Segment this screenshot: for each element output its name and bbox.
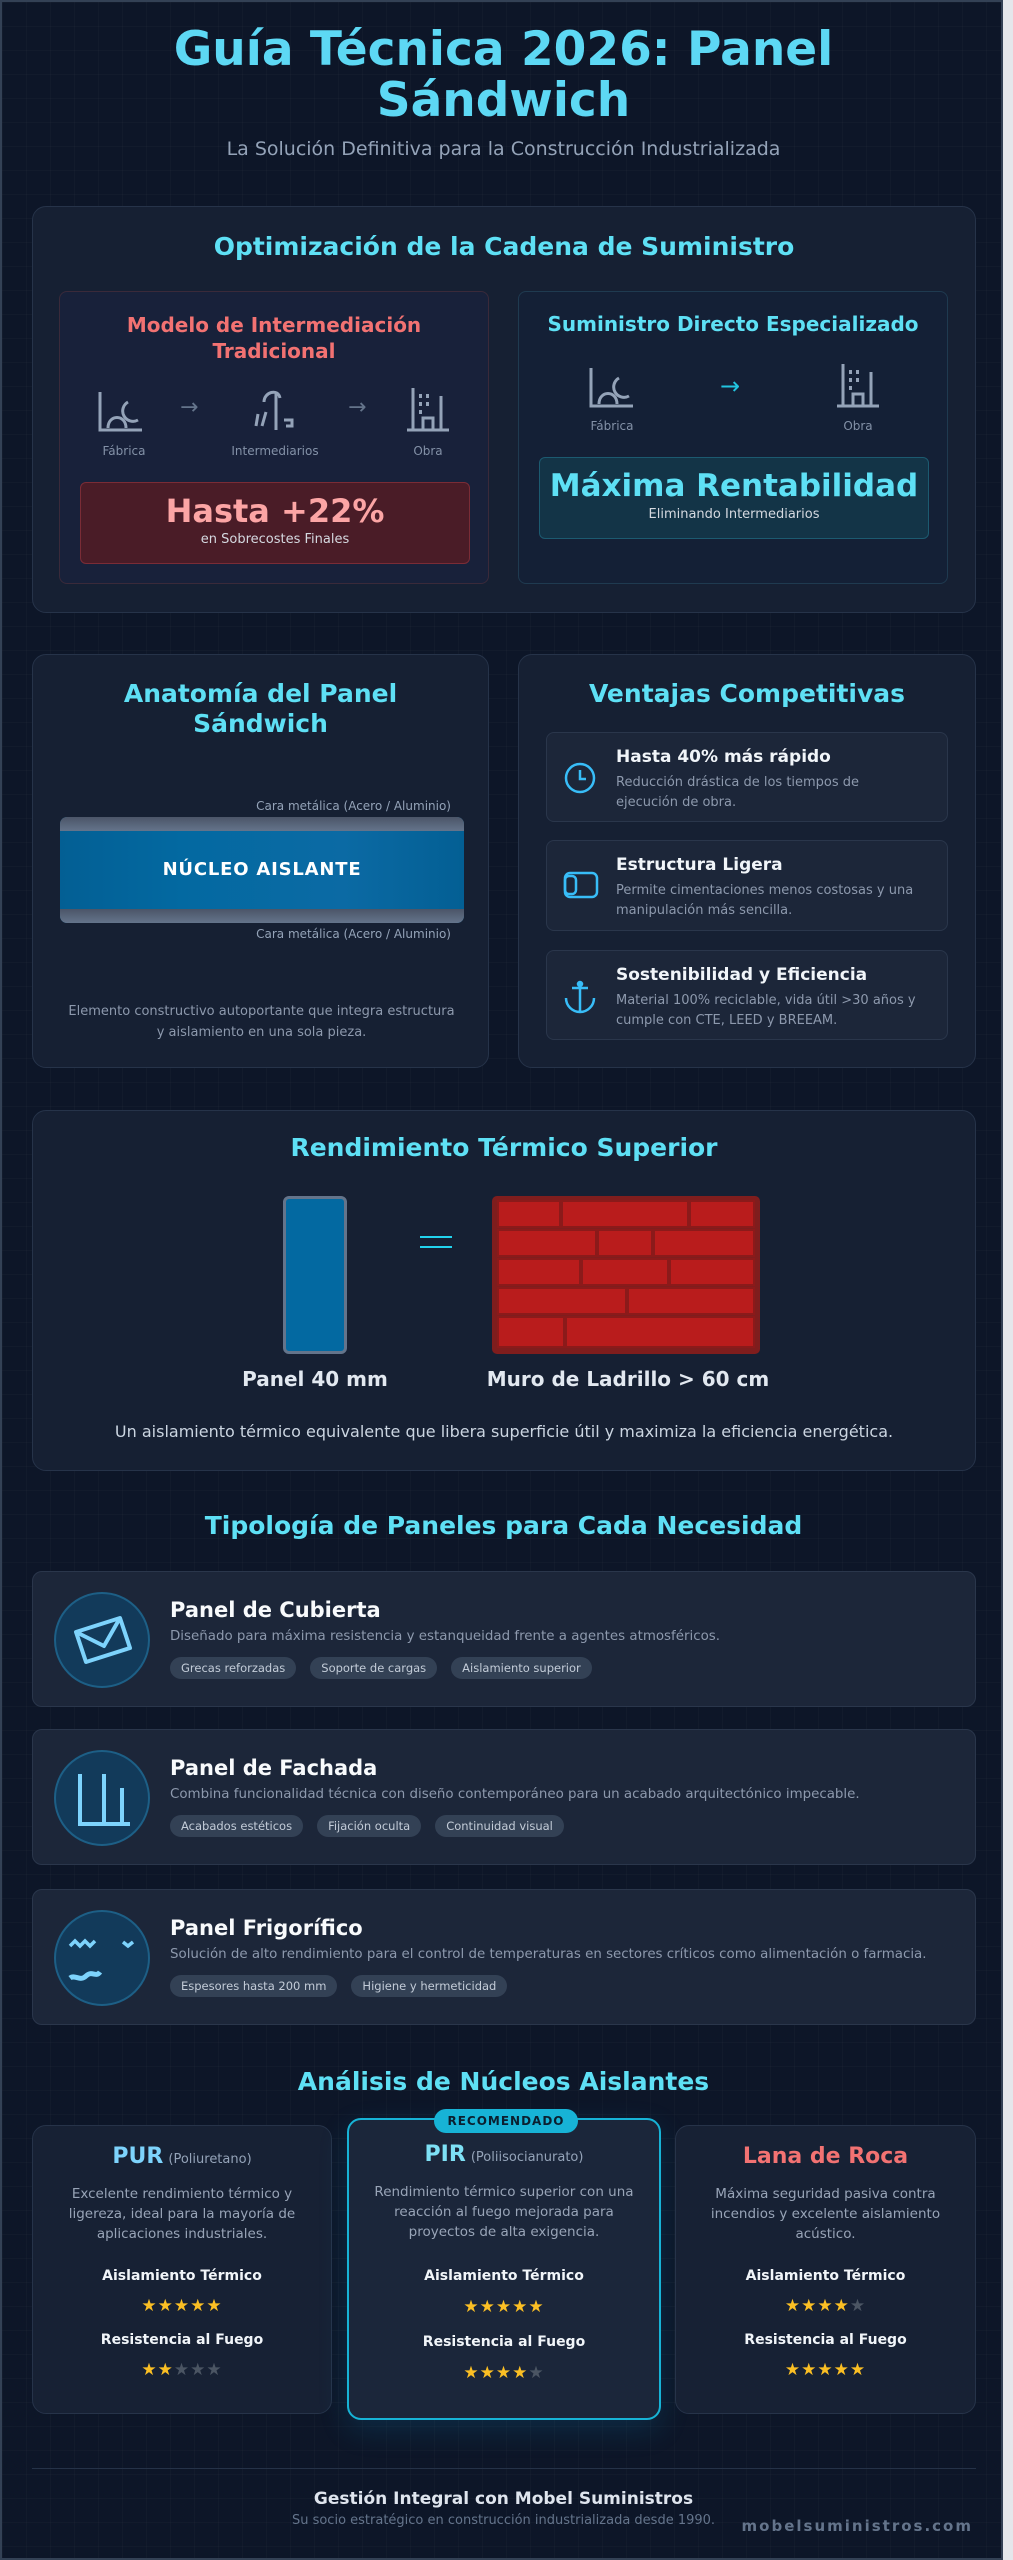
heading: direct: Suministro Directo Especializado [547,312,919,336]
card: rock wool: Resistencia al Fuego [744,2332,907,2348]
label: bottom face: Cara metálica (Acero / Aluminio) [256,927,451,941]
item: light structure: Estructura Ligera [616,855,783,875]
card: cold storage panel: Solución de alto rendimiento para el control de temperaturas en sectores críticos como alimentación o farmacia. [170,1947,927,1962]
card: PUR: ★★★★★ [141,2360,223,2380]
card: rock wool: Máxima seguridad pasiva contra incendios y excelente aislamiento acústico. [711,2186,940,2242]
tags: Fijación oculta [328,1819,410,1833]
badge [434,2109,578,2133]
labels: Fábrica [590,419,634,433]
sub-panel: direct supply: Obra [843,419,873,433]
icon: anchor [564,980,596,1014]
item: sustainability: Material 100% reciclable, vida útil >30 años y cumple con CTE, LEED y BREEAM. [616,993,916,1028]
tags: Higiene y hermeticidad [362,1979,496,1993]
label: panel 40mm: Panel 40 mm [242,1367,388,1391]
caption: y aislamiento en una sola pieza. [157,1025,366,1040]
callout: max profitability [539,457,929,539]
footer [292,2489,715,2528]
item: faster: Hasta 40% más rápido [616,747,831,767]
graphic: panel 40mm [283,1196,347,1354]
label: top face: Cara metálica (Acero / Aluminio) [256,799,451,813]
callout: +22%: en Sobrecostes Finales [201,532,349,547]
card: PIR recommended: Aislamiento Térmico [424,2268,584,2284]
callout: +22%: Hasta +22% [166,492,384,530]
title: Guía Técnica 2026: Panel [174,22,833,77]
sub-panel: traditional model: Intermediarios [231,444,319,458]
icon: waves [54,1910,150,2006]
label: brick wall: Muro de Ladrillo > 60 cm [487,1367,769,1391]
icon: factory [98,392,142,432]
item: faster [546,732,948,822]
tags: Espesores hasta 200 mm [181,1979,326,1993]
footer: Gestión Integral con Mobel Suministros [314,2489,693,2509]
sub-panel: direct supply [518,291,948,584]
card: PIR recommended: ★★★★★ [463,2297,545,2317]
heading: anatomy: Sándwich [193,709,328,738]
card: PUR [32,2125,332,2414]
card: PIR recommended [347,2118,661,2420]
heading: anatomy: Anatomía del Panel [124,679,397,708]
panel: anatomy [32,654,489,1068]
card: rock wool [675,2125,976,2414]
panel: supply chain [32,206,976,613]
card: PUR: Excelente rendimiento térmico y ligereza, ideal para la mayoría de aplicaciones industriales. [69,2186,295,2242]
heading: traditional [127,313,421,363]
card: rock wool: ★★★★★ [785,2360,866,2380]
item: sustainability [546,950,948,1040]
tags: Acabados estéticos [181,1819,292,1833]
heading: core analysis: Análisis de Núcleos Aislantes [298,2067,709,2096]
item: light structure: Permite cimentaciones menos costosas y una manipulación más sencilla. [616,883,913,918]
caption: Un aislamiento térmico equivalente que libera superficie útil y maximiza la eficiencia energética. [115,1422,893,1441]
divider [32,2468,976,2469]
sub-panel: traditional model [59,291,489,584]
card: PUR: Resistencia al Fuego [101,2332,263,2348]
heading: traditional: Modelo de Intermediación [127,313,421,337]
diagram: sandwich panel: NÚCLEO AISLANTE [163,859,361,880]
heading: thermal: Rendimiento Térmico Superior [290,1133,718,1162]
diagram: sandwich panel [60,817,464,923]
title: Sándwich [377,73,630,128]
icon: facade [54,1750,150,1846]
caption: Elemento constructivo autoportante que integra estructura [68,1004,455,1019]
heading: traditional: Tradicional [212,339,336,363]
card: roof panel: Panel de Cubierta [170,1598,381,1622]
card: roof panel: Diseñado para máxima resistencia y estanqueidad frente a agentes atmosféricos. [170,1629,720,1644]
card: PUR: ★★★★★ [141,2296,223,2316]
card: PIR recommended: ★★★★★ [463,2363,545,2383]
panel: advantages [518,654,976,1068]
callout: max profitability: Eliminando Intermediarios [649,507,819,522]
tags: Aislamiento superior [462,1661,581,1675]
card: rock wool: Lana de Roca [743,2144,908,2169]
footer: Su socio estratégico en construcción industrializada desde 1990. [292,2513,715,2528]
caption [68,1004,455,1040]
subtitle: La Solución Definitiva para la Construcción Industrializada [227,138,780,160]
heading: advantages: Ventajas Competitivas [589,679,905,708]
icon: envelope [54,1592,150,1688]
card: facade panel [32,1729,976,1865]
item: faster: Reducción drástica de los tiempos de ejecución de obra. [616,775,859,810]
tags: Continuidad visual [446,1819,553,1833]
labels: Fábrica [102,444,146,458]
tags [170,1975,507,1997]
card: PUR: PUR (Poliuretano) [112,2144,252,2169]
card: PIR recommended: Rendimiento térmico superior con una reacción al fuego mejorada para proyectos de alta exigencia. [374,2184,634,2240]
tags [170,1657,592,1679]
badge: RECOMENDADO [447,2114,565,2128]
arrow: → [348,395,366,420]
heading: anatomy [124,679,397,738]
card: facade panel: Combina funcionalidad técnica con diseño contemporáneo para un acabado arquitectónico impecable. [170,1787,860,1802]
footer: domain: mobelsuministros.com [742,2517,973,2535]
card: cold storage panel [32,1889,976,2025]
tags: Soporte de cargas [321,1661,426,1675]
card: PIR recommended: Resistencia al Fuego [423,2334,585,2350]
heading: panel types: Tipología de Paneles para Cada Necesidad [205,1511,802,1540]
arrow: → [720,372,740,400]
callout: +22% [80,482,470,564]
icon: equals [420,1236,452,1248]
card: facade panel: Panel de Fachada [170,1756,377,1780]
heading: supply chain: Optimización de la Cadena de Suministro [214,232,794,261]
card: rock wool: ★★★★★ [785,2296,866,2316]
icon: roll [564,872,598,898]
icon: clock [564,762,596,794]
icon: factory [590,368,633,408]
title [174,22,833,128]
card: PUR: Aislamiento Térmico [102,2268,262,2284]
card: PIR recommended: PIR (Poliisocianurato) [425,2142,583,2167]
icon: building [407,388,449,432]
arrow: → [180,395,198,420]
tags: Grecas reforzadas [181,1661,285,1675]
icon: building [837,364,879,408]
graphic: brick wall [492,1196,760,1354]
icon: intermediaries [254,390,294,430]
card: roof panel [32,1571,976,1707]
item: light structure [546,840,948,931]
card: cold storage panel: Panel Frigorífico [170,1916,363,1940]
card: rock wool: Aislamiento Térmico [746,2268,905,2284]
panel: thermal [32,1110,976,1471]
item: sustainability: Sostenibilidad y Eficiencia [616,965,867,985]
tags [170,1815,564,1837]
callout: max profitability: Máxima Rentabilidad [550,468,918,504]
sub-panel: traditional model: Obra [413,444,443,458]
